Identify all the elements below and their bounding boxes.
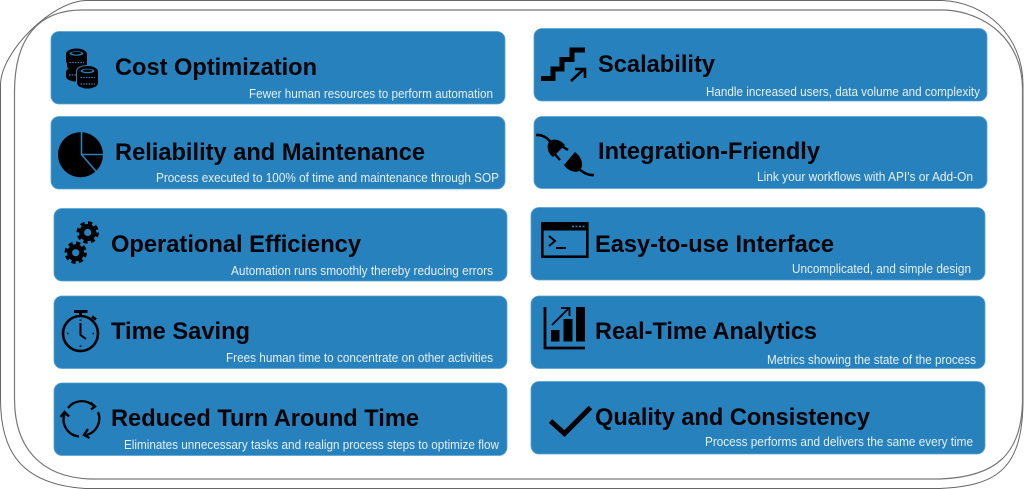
panel background <box>531 208 985 280</box>
panel: time saving <box>54 296 507 368</box>
heading: Easy-to-use Interface <box>595 231 834 258</box>
panel background <box>54 383 507 456</box>
panel: easy-to-use interface <box>531 208 985 280</box>
description: Metrics showing the state of the process <box>767 353 976 367</box>
panel: reduced turn around time <box>54 383 507 456</box>
panel: cost optimization <box>51 32 505 104</box>
panel background <box>54 296 507 368</box>
heading: Operational Efficiency <box>111 231 362 258</box>
panel: real-time analytics <box>531 296 985 368</box>
icon: stairs with arrow <box>541 50 585 81</box>
panel background <box>51 32 505 104</box>
heading: Cost Optimization <box>115 54 317 81</box>
panel: reliability and maintenance <box>51 116 505 189</box>
heading: Time Saving <box>111 318 250 345</box>
description: Link your workflows with API's or Add-On <box>757 170 973 184</box>
heading: Scalability <box>598 51 716 78</box>
panel background <box>531 296 985 368</box>
heading: Quality and Consistency <box>595 404 871 431</box>
description: Fewer human resources to perform automation <box>249 87 493 101</box>
icon: gears <box>66 223 97 262</box>
description: Frees human time to concentrate on other activities <box>226 351 493 365</box>
panel background <box>534 28 987 101</box>
description: Process performs and delivers the same every time <box>705 435 973 449</box>
description: Process executed to 100% of time and maintenance through SOP <box>156 171 499 185</box>
panel background <box>531 382 985 454</box>
heading: Real-Time Analytics <box>595 318 817 345</box>
description: Automation runs smoothly thereby reducing errors <box>231 264 493 278</box>
heading: Reduced Turn Around Time <box>111 405 419 432</box>
panel background <box>51 116 505 189</box>
heading: Reliability and Maintenance <box>115 139 425 166</box>
panel: quality and consistency <box>531 382 985 454</box>
panel: operational efficiency <box>54 208 507 281</box>
description: Uncomplicated, and simple design <box>792 262 971 276</box>
panel background <box>54 208 507 281</box>
description: Handle increased users, data volume and complexity <box>706 85 981 99</box>
icon: plug <box>536 135 594 175</box>
panel: integration-friendly <box>534 116 987 188</box>
icon: cycle arrows <box>60 401 99 438</box>
icon: terminal window <box>541 222 588 257</box>
heading: Integration-Friendly <box>598 138 821 165</box>
icon: stopwatch <box>63 312 98 351</box>
panel background <box>534 116 987 188</box>
icon: bar chart with arrow <box>545 307 585 348</box>
icon: pie chart <box>58 130 105 177</box>
icon: coins <box>66 48 99 90</box>
description: Eliminates unnecessary tasks and realign process steps to optimize flow <box>124 438 500 452</box>
icon: check mark <box>550 408 590 434</box>
panel: scalability <box>534 28 987 101</box>
